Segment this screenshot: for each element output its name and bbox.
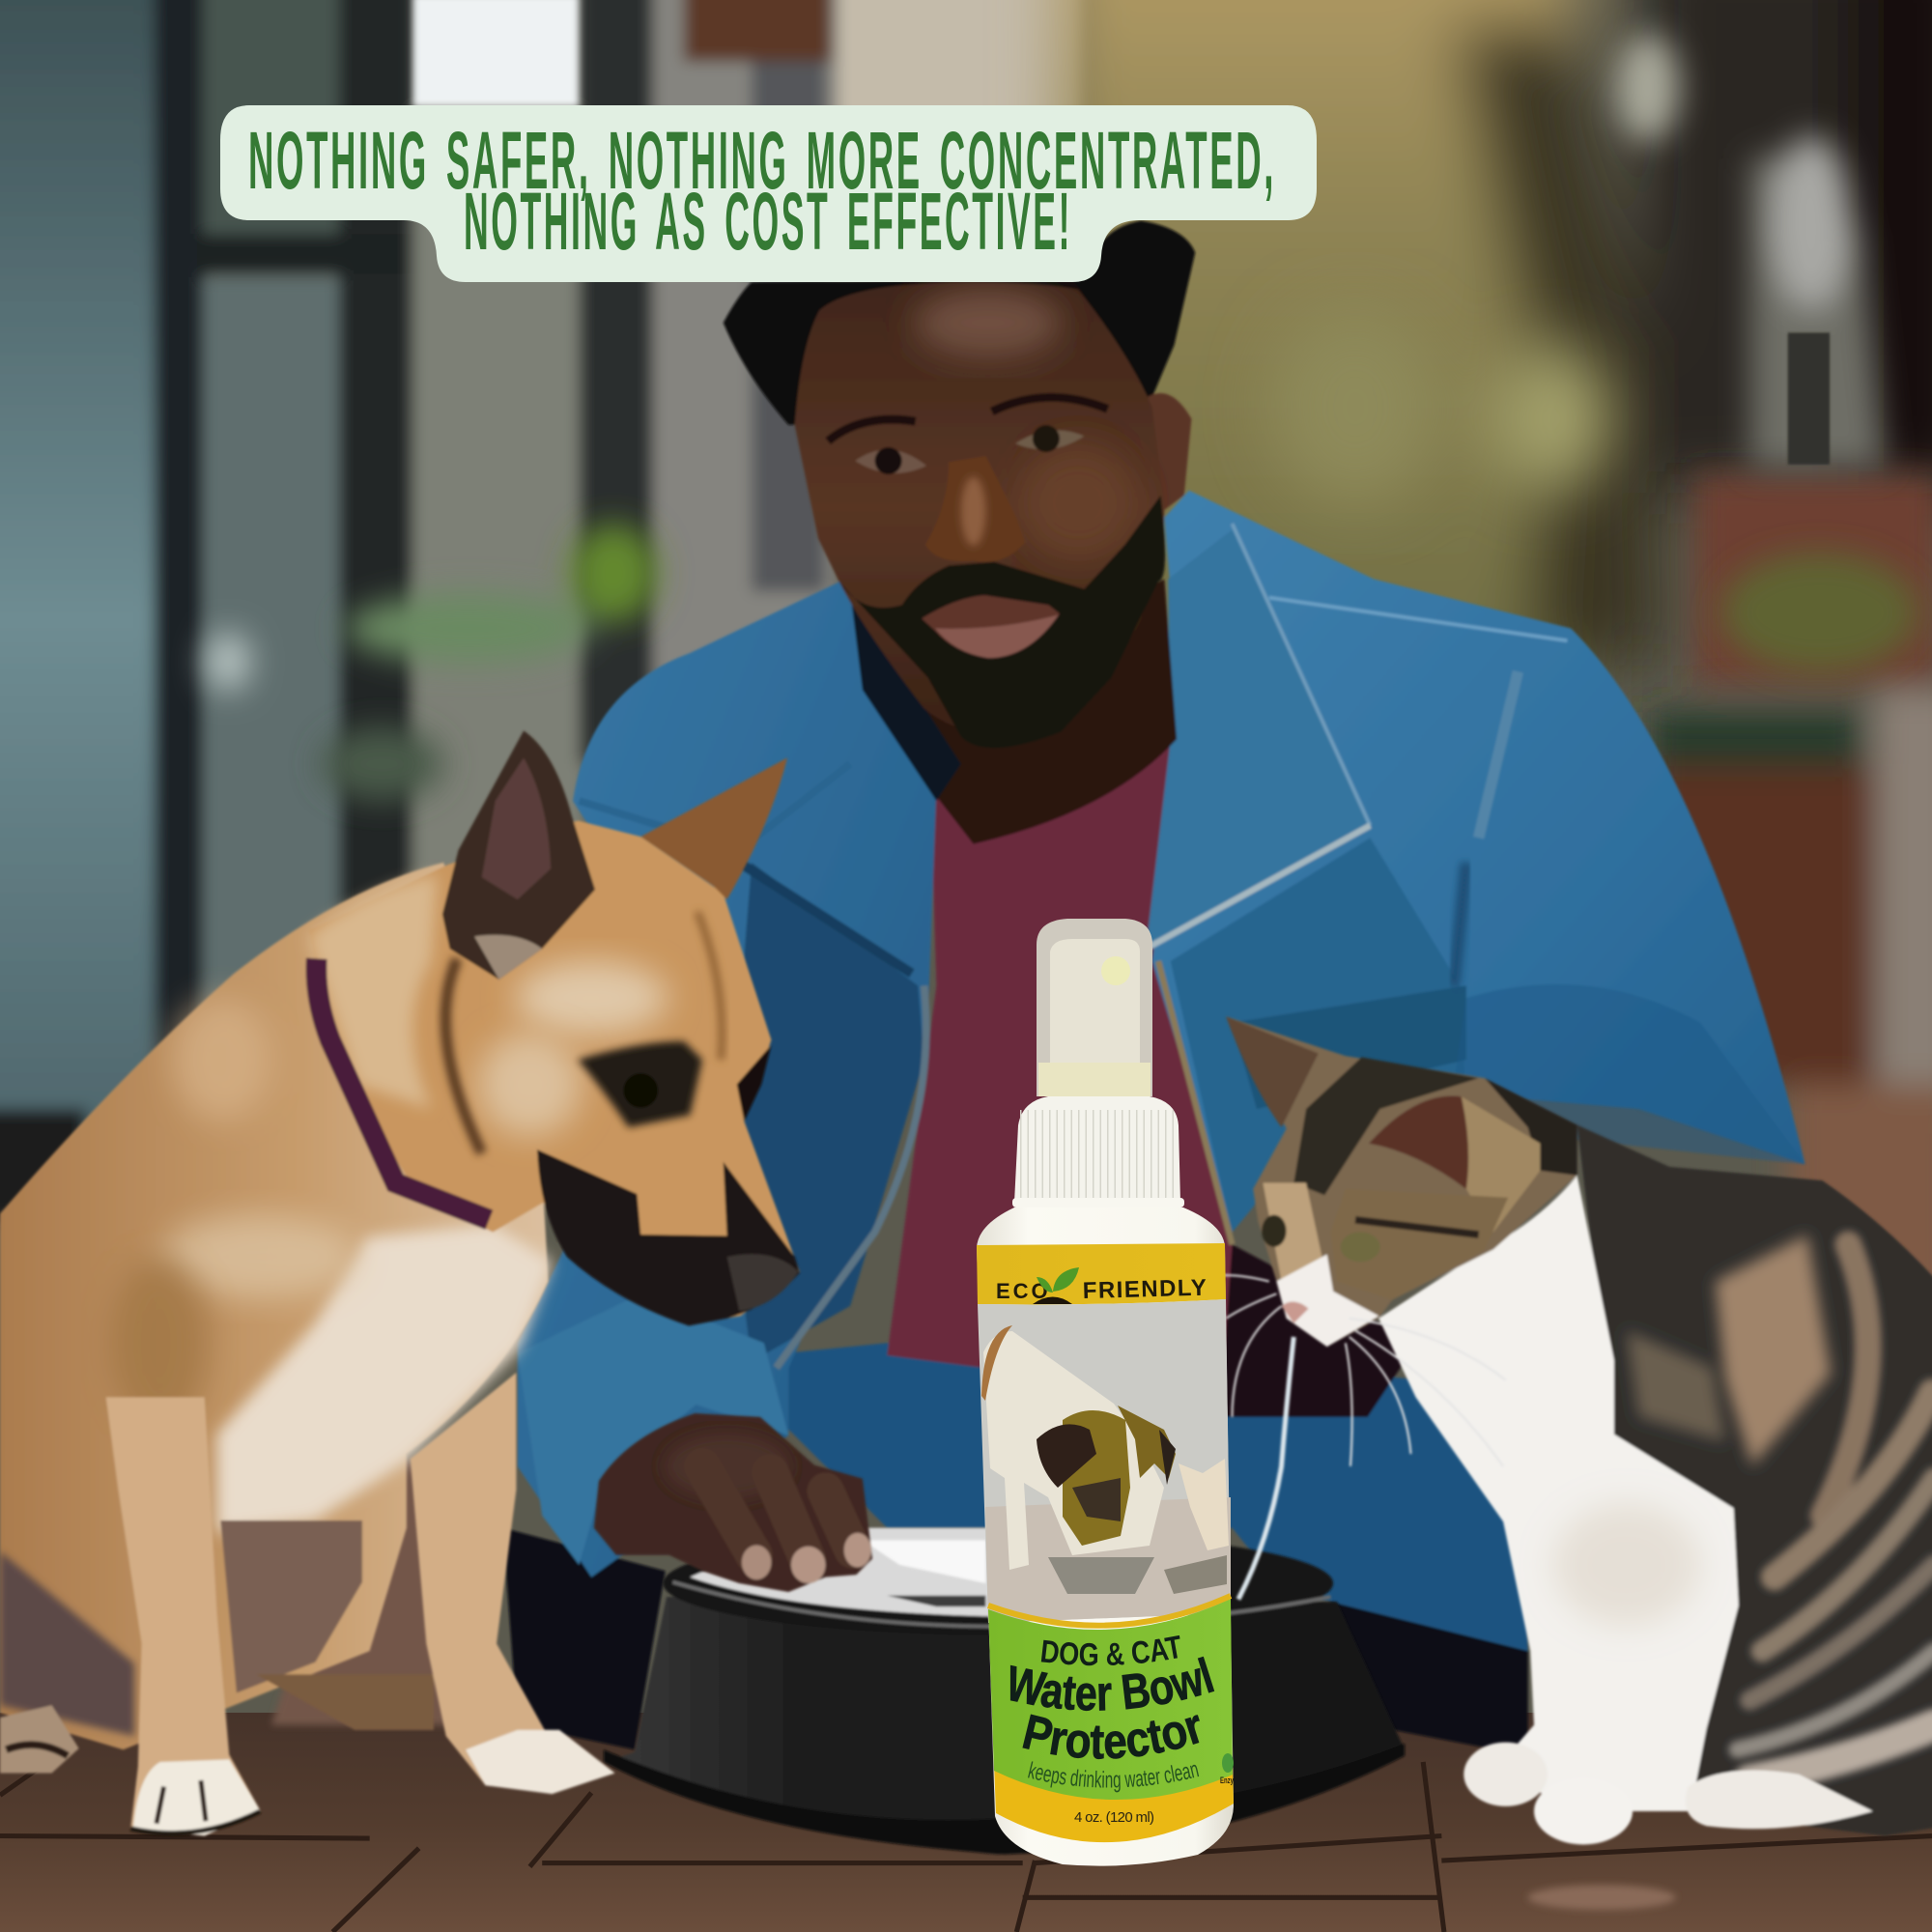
jacket [518,491,1805,1577]
hand [594,1413,872,1592]
whiskers [1195,1275,1506,1466]
tan fur patches [1716,1235,1831,1466]
label bowls [1048,1557,1154,1594]
water bowl [604,1528,1405,1855]
label: eco friendly: ECO [996,1279,1051,1303]
label: yellow bottom band [994,1763,1234,1842]
label: eco friendly: FRIENDLY [1082,1275,1207,1304]
brick floor [0,1459,1932,1932]
paws [1463,1743,1873,1844]
label: product name [1010,1634,1234,1826]
cat chest [1378,1176,1739,1811]
head [309,820,800,1324]
stripes [1737,1244,1932,1780]
cat inner ear [1369,1096,1468,1189]
bottle body [977,1208,1234,1866]
label: product name: 4 oz. (120 ml) [1074,1809,1154,1826]
water stream [1238,1337,1293,1600]
face [795,282,1164,733]
label: photo panel [978,1299,1231,1623]
brand logo leaf [1222,1753,1234,1773]
headline text [248,115,1276,267]
cat [1195,1016,1932,1844]
ear [1146,393,1191,513]
label: product name: Water Bowl [1010,1656,1215,1712]
man [502,220,1805,1756]
neck [924,579,1177,844]
headline text: NOTHING AS COST EFFECTIVE! [464,176,1072,267]
collar [1146,529,1370,949]
cheek [1331,1189,1508,1300]
label cat [1179,1459,1229,1550]
label: product name: Protector [1022,1714,1200,1760]
label dog body [983,1331,1164,1570]
label: yellow top band [977,1243,1226,1304]
left ear [442,730,595,980]
bottle collar [1012,1096,1184,1208]
cat head [1226,1016,1577,1347]
eyes [828,397,1108,474]
cat body [1577,1125,1932,1836]
label: product name: keeps drinking water clean [1028,1761,1200,1793]
chest [216,1225,552,1533]
label: product name: Enzy [1220,1776,1234,1785]
maroon shirt [887,733,1368,1417]
front leg 2 [411,1373,614,1792]
lips [922,595,1060,658]
jeans [764,1343,1528,1651]
nose [925,456,1025,562]
far eye and muzzle [737,1045,771,1122]
label: green panel [988,1599,1233,1800]
label: eco friendly [996,1267,1207,1304]
collar [316,958,489,1220]
sleeve cuff [518,1293,788,1565]
beard [839,496,1165,748]
hair [724,220,1195,425]
belly and rear leg [0,1551,134,1736]
right ear [640,757,787,899]
label: product name: DOG & CAT [1041,1634,1180,1665]
label dog head [1063,1410,1130,1546]
dark lower shadow [502,1528,1528,1756]
dog [0,730,800,1836]
bubble shape [220,105,1317,282]
headline speech bubble [220,105,1317,282]
bottle overcap [1037,919,1152,1096]
muzzle [1276,1254,1378,1347]
front leg 1 [106,1397,260,1834]
product bottle [977,919,1234,1866]
body [0,863,549,1749]
